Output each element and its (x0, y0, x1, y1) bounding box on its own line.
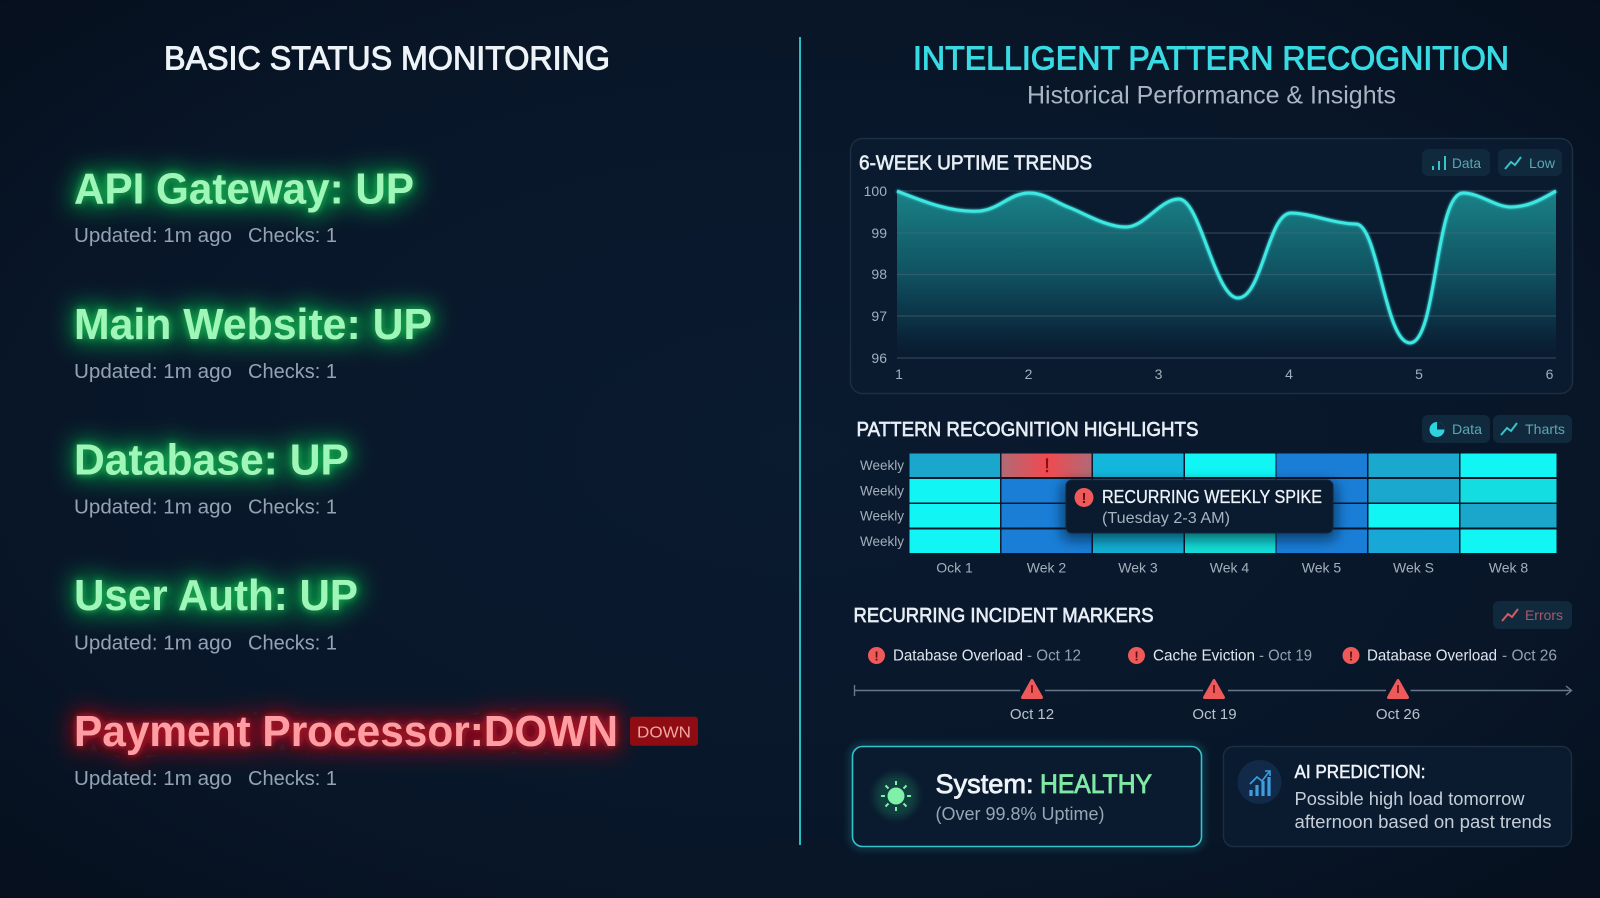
week labels: Wek 4 (1210, 560, 1249, 576)
line chart: 100 (864, 183, 887, 199)
timeline (854, 680, 1572, 723)
status: Payment Processor: DOWN (637, 724, 691, 742)
incident: database overload oct 26: ! (1349, 648, 1353, 664)
chip: low (1498, 149, 1562, 176)
status: API Gateway: Checks: 1 (248, 225, 337, 247)
week labels: Wek 3 (1118, 560, 1158, 576)
status: User Auth (74, 571, 358, 654)
status: Main Website: Checks: 1 (248, 361, 337, 383)
card: system healthy: HEALTHY (1040, 769, 1152, 799)
status: User Auth: User Auth: UP (74, 571, 358, 620)
status: User Auth: Checks: 1 (248, 632, 337, 654)
chart title: 6-WEEK UPTIME TRENDS (859, 152, 1092, 174)
panel: 6-week uptime trends (850, 138, 1572, 394)
week labels: Ock 1 (936, 560, 973, 576)
status: Payment Processor (74, 707, 698, 790)
incident: cache eviction oct 19: ! (1134, 648, 1139, 664)
status: API Gateway (74, 164, 414, 247)
line chart: 96 (871, 350, 887, 366)
left heading: basic status monitoring: BASIC STATUS MONITORING (164, 40, 610, 76)
row labels: Weekly (860, 482, 904, 498)
row labels: Weekly (860, 457, 904, 473)
subtitle: Historical Performance & Insights (1027, 82, 1396, 110)
status: Database (74, 436, 349, 519)
line chart: 98 (871, 266, 887, 282)
line chart: 6 (1546, 366, 1554, 382)
line chart: 3 (1155, 366, 1163, 382)
row labels (860, 457, 904, 549)
status: Main Website: Main Website: UP (74, 300, 432, 349)
chip: tharts (1493, 415, 1572, 443)
line chart: 5 (1415, 366, 1423, 382)
incident: database overload oct 12: ! (874, 648, 879, 664)
row labels: Weekly (860, 533, 904, 549)
line chart: 4 (1285, 366, 1293, 382)
week labels (936, 560, 1528, 576)
panel: pattern recognition highlights (856, 415, 1572, 576)
timeline: Oct 12 (1010, 706, 1054, 723)
chip: low: Low (1529, 155, 1556, 171)
icon: sun (874, 774, 918, 818)
chip: data: Data (1452, 421, 1482, 437)
card: AI prediction: Possible high load tomorrow (1294, 789, 1526, 809)
status: Payment Processor: Checks: 1 (248, 768, 337, 790)
week labels: Wek 5 (1302, 560, 1341, 576)
incident: database overload oct 26 (1342, 647, 1557, 664)
incident: cache eviction oct 19: Cache Eviction (1153, 648, 1255, 664)
chip: errors (1493, 601, 1572, 629)
card: system healthy (852, 746, 1202, 847)
chip: errors: Errors (1525, 607, 1563, 623)
incident: database overload oct 26: Database Overload (1367, 648, 1497, 664)
right heading: intelligent pattern recognition: INTELLIGENT PATTERN RECOGNITION (913, 40, 1509, 76)
tooltip: recurring weekly spike: RECURRING WEEKLY SPIKE (1102, 487, 1322, 507)
timeline: Oct 19 (1192, 706, 1237, 723)
status: Payment Processor: Updated: 1m ago (74, 768, 232, 790)
line chart: 97 (871, 308, 887, 324)
chip: data: Data (1452, 155, 1481, 171)
card: system healthy: System: (936, 769, 1034, 799)
incident: database overload oct 12: - Oct 12 (1027, 648, 1081, 664)
line chart: 1 (895, 366, 903, 382)
week labels: Wek 8 (1489, 560, 1528, 576)
heatmap: ! (1044, 456, 1050, 477)
panel: recurring incident markers (854, 601, 1572, 723)
row labels: Weekly (860, 508, 904, 524)
incident: cache eviction oct 19: - Oct 19 (1259, 648, 1312, 664)
tooltip: recurring weekly spike (1062, 480, 1337, 540)
week labels: Wek 2 (1027, 560, 1066, 576)
incident: cache eviction oct 19 (1128, 647, 1312, 664)
line chart (864, 183, 1556, 382)
incident: database overload oct 26: - Oct 26 (1502, 648, 1557, 664)
status: User Auth: Updated: 1m ago (74, 632, 232, 654)
incident: database overload oct 12: Database Overload (893, 648, 1023, 664)
status: Database: Checks: 1 (248, 497, 337, 519)
chip: data (1422, 415, 1490, 443)
status: Database: Database: UP (74, 436, 349, 484)
status: API Gateway: Updated: 1m ago (74, 225, 232, 247)
chip: data (1422, 149, 1490, 176)
card: AI prediction: afternoon based on past trends (1294, 812, 1552, 832)
heatmap (910, 454, 1556, 553)
icon: trend chart (1238, 760, 1282, 804)
status: API Gateway: API Gateway: UP (74, 164, 414, 214)
tooltip: recurring weekly spike: ! (1082, 490, 1086, 507)
status list (74, 164, 698, 790)
line chart: 99 (871, 225, 887, 241)
status: Payment Processor: Payment Processor:DOWN (74, 707, 618, 756)
status: Main Website (74, 300, 432, 383)
card: AI prediction (1224, 746, 1572, 846)
section heading: PATTERN RECOGNITION HIGHLIGHTS (856, 419, 1198, 441)
tooltip: recurring weekly spike: (Tuesday 2-3 AM) (1102, 510, 1230, 527)
status: Database: Updated: 1m ago (74, 497, 232, 519)
week labels: Wek S (1393, 560, 1434, 576)
vertical divider (797, 37, 803, 845)
card: system healthy: (Over 99.8% Uptime) (936, 804, 1104, 824)
timeline: Oct 26 (1376, 706, 1420, 723)
status: Main Website: Updated: 1m ago (74, 361, 232, 383)
chip: tharts: Tharts (1525, 421, 1565, 437)
incident: database overload oct 12 (868, 647, 1081, 664)
line chart: 2 (1025, 366, 1033, 382)
card: AI prediction: AI PREDICTION: (1294, 762, 1426, 782)
section heading: RECURRING INCIDENT MARKERS (854, 605, 1154, 627)
